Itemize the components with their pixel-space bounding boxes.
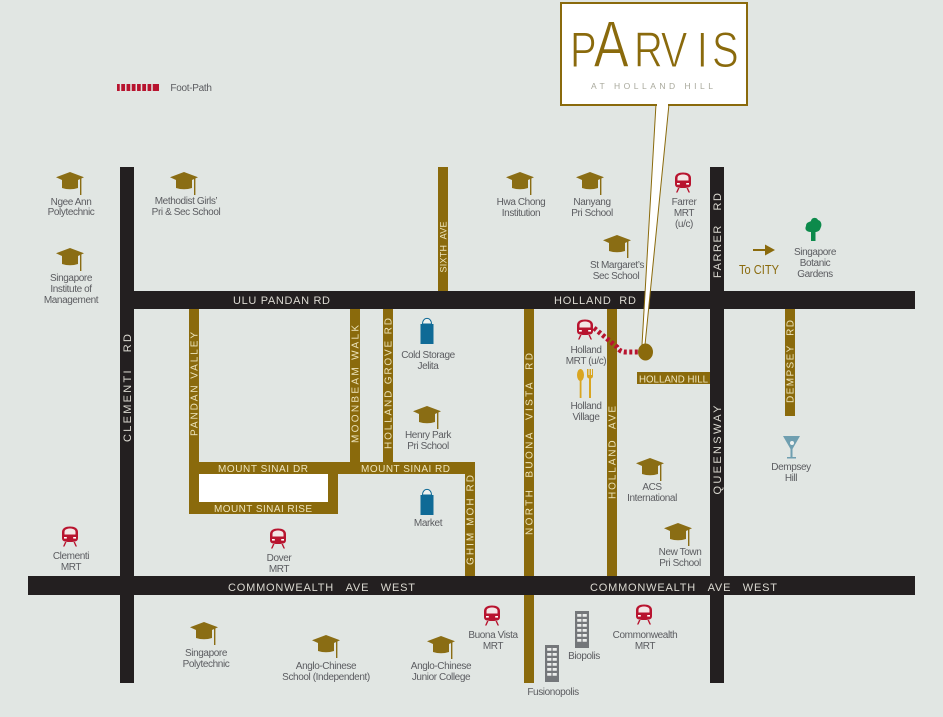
- road labels: gold roads: HOLLAND GROVE RD: [384, 318, 394, 449]
- MRT: Holland: [566, 320, 606, 367]
- school: Ngee Ann Polytechnic: Ngee Ann: [51, 197, 91, 208]
- MRT: Clementi: MRT: [61, 562, 81, 573]
- school: Hwa Chong: Hwa Chong: [497, 197, 545, 208]
- gold road network: [189, 167, 795, 683]
- school: Singapore Institute of Management: Management: [44, 295, 99, 306]
- road labels: black roads: HOLLAND RD: [554, 295, 636, 307]
- foot-path route: [594, 328, 638, 352]
- school: Hwa Chong: Institution: [502, 208, 540, 219]
- MRT: Dover: Dover: [267, 553, 292, 564]
- school: ACS International: International: [627, 493, 677, 504]
- road labels: black roads: QUEENSWAY: [712, 405, 724, 494]
- road labels: gold roads: MOONBEAM WALK: [350, 325, 362, 443]
- building: Fusionopolis: Fusionopolis: [527, 687, 579, 698]
- road labels: gold roads: MOUNT SINAI DR: [218, 464, 308, 475]
- road labels: gold roads: MOUNT SINAI RD: [361, 464, 450, 475]
- road labels: gold roads: PANDAN VALLEY: [190, 332, 200, 436]
- logo wordmark: A: [594, 7, 629, 81]
- school: Ngee Ann Polytechnic: Polytechnic: [48, 207, 95, 218]
- school: Nanyang: Nanyang: [573, 197, 611, 208]
- road labels: gold roads: MOUNT SINAI RISE: [214, 504, 312, 515]
- to city label: To CITY: [739, 263, 780, 277]
- road labels: gold roads: SIXTH AVE: [438, 222, 448, 272]
- road labels: black roads: CLEMENTI RD: [122, 334, 134, 442]
- school: Henry Park: [405, 406, 452, 452]
- icon: tree, Singapore Botanic Gardens: Gardens: [797, 269, 833, 280]
- road labels: black roads: FARRER RD: [712, 193, 724, 278]
- icon: tree, Singapore Botanic Gardens: Botanic: [800, 258, 831, 269]
- logo wordmark: V: [661, 22, 687, 78]
- dining: Holland Village: [570, 369, 602, 423]
- school: Ngee Ann Polytechnic: [48, 172, 95, 218]
- icon: cocktail, Dempsey Hill: Hill: [785, 473, 797, 484]
- school: St Margaret's: St Margaret’s: [590, 260, 644, 271]
- school: New Town: Pri School: [659, 558, 701, 569]
- arrow: to city: [739, 244, 780, 277]
- school: ACS International: ACS: [642, 482, 662, 493]
- MRT: Farrer: [672, 172, 697, 230]
- dining: Holland Village: Village: [572, 412, 600, 423]
- logo wordmark: I: [697, 22, 708, 78]
- road labels: gold roads: HOLLAND HILL: [639, 374, 708, 386]
- shopping: Market: Market: [414, 518, 443, 529]
- icon: tree, Singapore Botanic Gardens: Singapore: [794, 247, 837, 258]
- school: Nanyang: Pri School: [571, 208, 613, 219]
- MRT: Clementi: [53, 526, 89, 573]
- MRT: Commonwealth: MRT: [635, 641, 655, 652]
- MRT: Farrer: (u/c): [675, 219, 693, 230]
- school: Anglo-Chinese JC: [411, 636, 472, 683]
- school: Anglo-Chinese JC: Anglo-Chinese: [411, 661, 472, 672]
- MRT: Farrer: Farrer: [672, 197, 697, 208]
- school: Singapore Polytechnic: Singapore: [185, 648, 228, 659]
- road labels: black roads: ULU PANDAN RD: [233, 295, 330, 307]
- school: Methodist Girls: [152, 172, 220, 218]
- callout: Parvis logo: [561, 3, 747, 345]
- shopping: Cold Storage Jelita: Jelita: [418, 361, 439, 372]
- school: St Margaret's: Sec School: [593, 271, 639, 282]
- school: Nanyang: [571, 172, 613, 219]
- road labels: gold roads: HOLLAND AVE: [608, 406, 618, 499]
- black road network: [28, 167, 915, 683]
- building: Fusionopolis: [527, 645, 579, 698]
- road labels: black roads: COMMONWEALTH AVE WEST: [590, 582, 777, 594]
- school: Hwa Chong: [497, 172, 545, 219]
- school: Singapore Polytechnic: [183, 622, 230, 670]
- logo subtitle: AT HOLLAND HILL: [591, 81, 713, 91]
- icon: cocktail, Dempsey Hill: Dempsey: [771, 462, 811, 473]
- white block: Mount Sinai: [199, 474, 328, 502]
- school: New Town: New Town: [659, 547, 701, 558]
- school: Henry Park: Henry Park: [405, 430, 452, 441]
- building: Biopolis: Biopolis: [568, 651, 600, 662]
- school: Anglo-Chinese Independent: School (Independent): [282, 672, 370, 683]
- icon: cocktail, Dempsey Hill: [771, 436, 811, 484]
- MRT: Holland: Holland: [570, 345, 602, 356]
- logo wordmark: P: [570, 22, 597, 78]
- building: Biopolis: [568, 611, 600, 662]
- MRT: Holland: MRT (u/c): [566, 356, 606, 367]
- MRT: Dover: MRT: [269, 564, 289, 575]
- school: Henry Park: Pri School: [407, 441, 449, 452]
- MRT: Buona Vista: Buona Vista: [468, 630, 519, 641]
- foot-path legend: [117, 83, 212, 94]
- MRT: Clementi: Clementi: [53, 551, 89, 562]
- dining: Holland Village: Holland: [570, 401, 602, 412]
- MRT: Farrer: MRT: [674, 208, 694, 219]
- icon: tree, Singapore Botanic Gardens: [794, 218, 837, 280]
- school: St Margaret's: [590, 235, 644, 282]
- road labels: black roads: COMMONWEALTH AVE WEST: [228, 582, 415, 594]
- MRT: Buona Vista: MRT: [483, 641, 503, 652]
- road labels: gold roads: NORTH BUONA VISTA RD: [524, 353, 536, 535]
- road labels: black roads: [122, 193, 777, 594]
- MRT: Dover: [267, 528, 292, 575]
- road labels: gold roads: GHIM MOH RD: [466, 475, 476, 565]
- school: Anglo-Chinese Independent: [282, 635, 370, 683]
- shopping: Cold Storage Jelita: [401, 318, 456, 372]
- site marker: [638, 344, 653, 360]
- school: Anglo-Chinese JC: Junior College: [412, 672, 471, 683]
- school: New Town: [659, 523, 701, 569]
- school: Anglo-Chinese Independent: Anglo-Chinese: [296, 661, 357, 672]
- MRT: Commonwealth: Commonwealth: [613, 630, 677, 641]
- school: Singapore Institute of Management: Institute of: [50, 284, 92, 295]
- road labels: gold roads: DEMPSEY RD: [786, 320, 796, 403]
- MRT: Buona Vista: [468, 606, 519, 652]
- school: ACS International: [627, 458, 677, 504]
- shopping: Market: [414, 489, 443, 529]
- school: Singapore Institute of Management: [44, 248, 99, 306]
- school: Singapore Polytechnic: Polytechnic: [183, 659, 230, 670]
- school: Singapore Institute of Management: Singapore: [50, 273, 93, 284]
- school: Methodist Girls: Pri & Sec School: [152, 207, 220, 218]
- foot-path legend: Foot-Path: [170, 83, 212, 94]
- shopping: Cold Storage Jelita: Cold Storage: [401, 350, 456, 361]
- MRT: Commonwealth: [613, 604, 677, 652]
- logo wordmark: S: [712, 22, 739, 78]
- school: Methodist Girls: Methodist Girls’: [155, 196, 217, 207]
- road labels: gold roads: [190, 222, 796, 565]
- logo wordmark: R: [634, 22, 663, 78]
